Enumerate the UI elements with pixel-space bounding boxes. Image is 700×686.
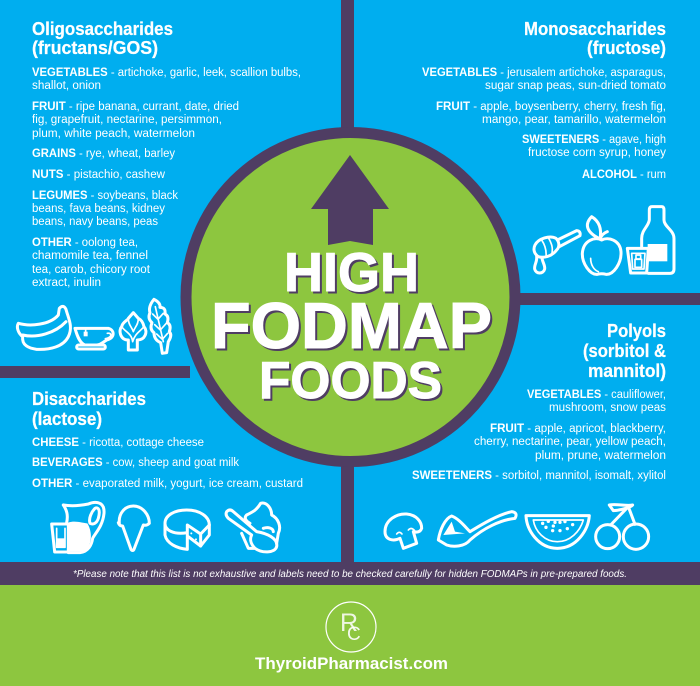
text block: oligosaccharides food list: beans, fava beans, kidney [32,203,165,215]
title: high fodmap foods: FOODS [259,352,442,410]
disclaimer text: *Please note that this list is not exhaustive and labels need to be checked carefully for hidden FODMAPs in pre-prepared foods. [73,569,627,580]
heading: polyols: Polyols [607,321,666,341]
text block: disaccharides food list [32,437,303,490]
heading: polyols [583,321,666,381]
text block: disaccharides food list: OTHER - evaporated milk, yogurt, ice cream, custard [32,478,303,490]
text block: monosaccharides food list: sugar snap peas, sun-dried tomato [485,80,666,92]
text block: polyols food list: SWEETENERS - sorbitol, mannitol, isomalt, xylitol [412,470,666,482]
text block: oligosaccharides food list: extract, inulin [32,277,101,289]
heading: monosaccharides: Monosaccharides [524,19,666,39]
icon: spoon with custard [226,503,280,552]
heading: monosaccharides [524,19,666,58]
text block: oligosaccharides food list: LEGUMES - soybeans, black [32,190,178,202]
title: high fodmap foods: FODMAP [211,289,492,362]
text block: monosaccharides food list: VEGETABLES - jerusalem artichoke, asparagus, [422,67,666,79]
heading: disaccharides: Disaccharides [32,389,146,409]
text block: polyols food list: plum, prune, watermelon [535,450,666,462]
arrow: up [311,155,389,245]
heading: polyols: mannitol) [588,361,666,381]
heading: oligosaccharides: (fructans/GOS) [32,38,158,58]
text block: oligosaccharides food list: VEGETABLES - artichoke, garlic, leek, scallion bulbs, [32,67,301,79]
text block: oligosaccharides food list [32,67,301,289]
panel: polyols [385,321,666,549]
icon: teacup [75,328,113,349]
centre circle [186,132,515,462]
icon: honey dipper [534,231,580,273]
text block: monosaccharides food list: FRUIT - apple, boysenberry, cherry, fresh fig, [436,101,666,113]
text block: monosaccharides food list: mango, pear, tamarillo, watermelon [482,114,666,126]
logo: RC monogram [326,602,376,652]
disclaimer band [0,562,700,585]
text block: monosaccharides food list [422,67,666,181]
panel: oligosaccharides [17,19,301,353]
text block: polyols food list: mushroom, snow peas [549,402,666,414]
icon: cherries [596,505,649,549]
text block: oligosaccharides food list: OTHER - oolong tea, [32,237,138,249]
icon: spoon of powder [438,512,516,546]
text block: oligosaccharides food list: plum, white peach, watermelon [32,128,195,140]
logo: RC monogram: R [340,609,358,637]
text block: oligosaccharides food list: NUTS - pistachio, cashew [32,169,166,181]
text block: polyols food list: cherry, nectarine, pear, yellow peach, [474,436,666,448]
panel: monosaccharides [422,19,674,274]
icon: ice cream cone [118,506,149,550]
logo: RC monogram: C [347,624,361,645]
heading: oligosaccharides [32,19,173,58]
website url: ThyroidPharmacist.com [255,654,448,673]
icon: bottle and glass [627,207,674,273]
text block: oligosaccharides food list: fig, grapefruit, nectarine, persimmon, [32,114,222,126]
icon: watermelon slice [526,516,589,548]
text block: monosaccharides food list: SWEETENERS - agave, high [522,134,666,146]
footer [0,585,700,686]
icon: milk jug and glass [52,502,104,553]
icon: artichoke [120,313,146,350]
heading: oligosaccharides: Oligosaccharides [32,19,173,39]
heading: disaccharides: (lactose) [32,409,102,429]
title: high fodmap foods [211,241,492,410]
text block: oligosaccharides food list: GRAINS - rye, wheat, barley [32,148,175,160]
text block: polyols food list [412,389,666,482]
icon: banana [17,306,70,349]
heading: polyols: (sorbitol & [583,341,666,361]
text block: oligosaccharides food list: beans, navy beans, peas [32,216,158,228]
text block: disaccharides food list: BEVERAGES - cow, sheep and goat milk [32,457,239,469]
icon: cheese wheel [165,510,209,549]
heading: monosaccharides: (fructose) [587,38,666,58]
icon: mushroom [385,514,422,548]
text block: oligosaccharides food list: shallot, onion [32,80,101,92]
title: high fodmap foods: HIGH [284,241,419,303]
text block: oligosaccharides food list: chamomile tea, fennel [32,250,148,262]
text block: disaccharides food list: CHEESE - ricotta, cottage cheese [32,437,204,449]
text block: monosaccharides food list: fructose corn syrup, honey [528,147,666,159]
icon: apple [582,217,621,274]
panel: disaccharides [32,389,303,553]
heading: disaccharides [32,389,146,429]
text block: oligosaccharides food list: tea, carob, chicory root [32,264,151,276]
text block: polyols food list: VEGETABLES - cauliflower, [527,389,666,401]
icon: wheat [149,299,171,353]
text block: polyols food list: FRUIT - apple, apricot, blackberry, [490,423,666,435]
text block: monosaccharides food list: ALCOHOL - rum [582,169,666,181]
text block: oligosaccharides food list: FRUIT - ripe banana, currant, date, dried [32,101,239,113]
